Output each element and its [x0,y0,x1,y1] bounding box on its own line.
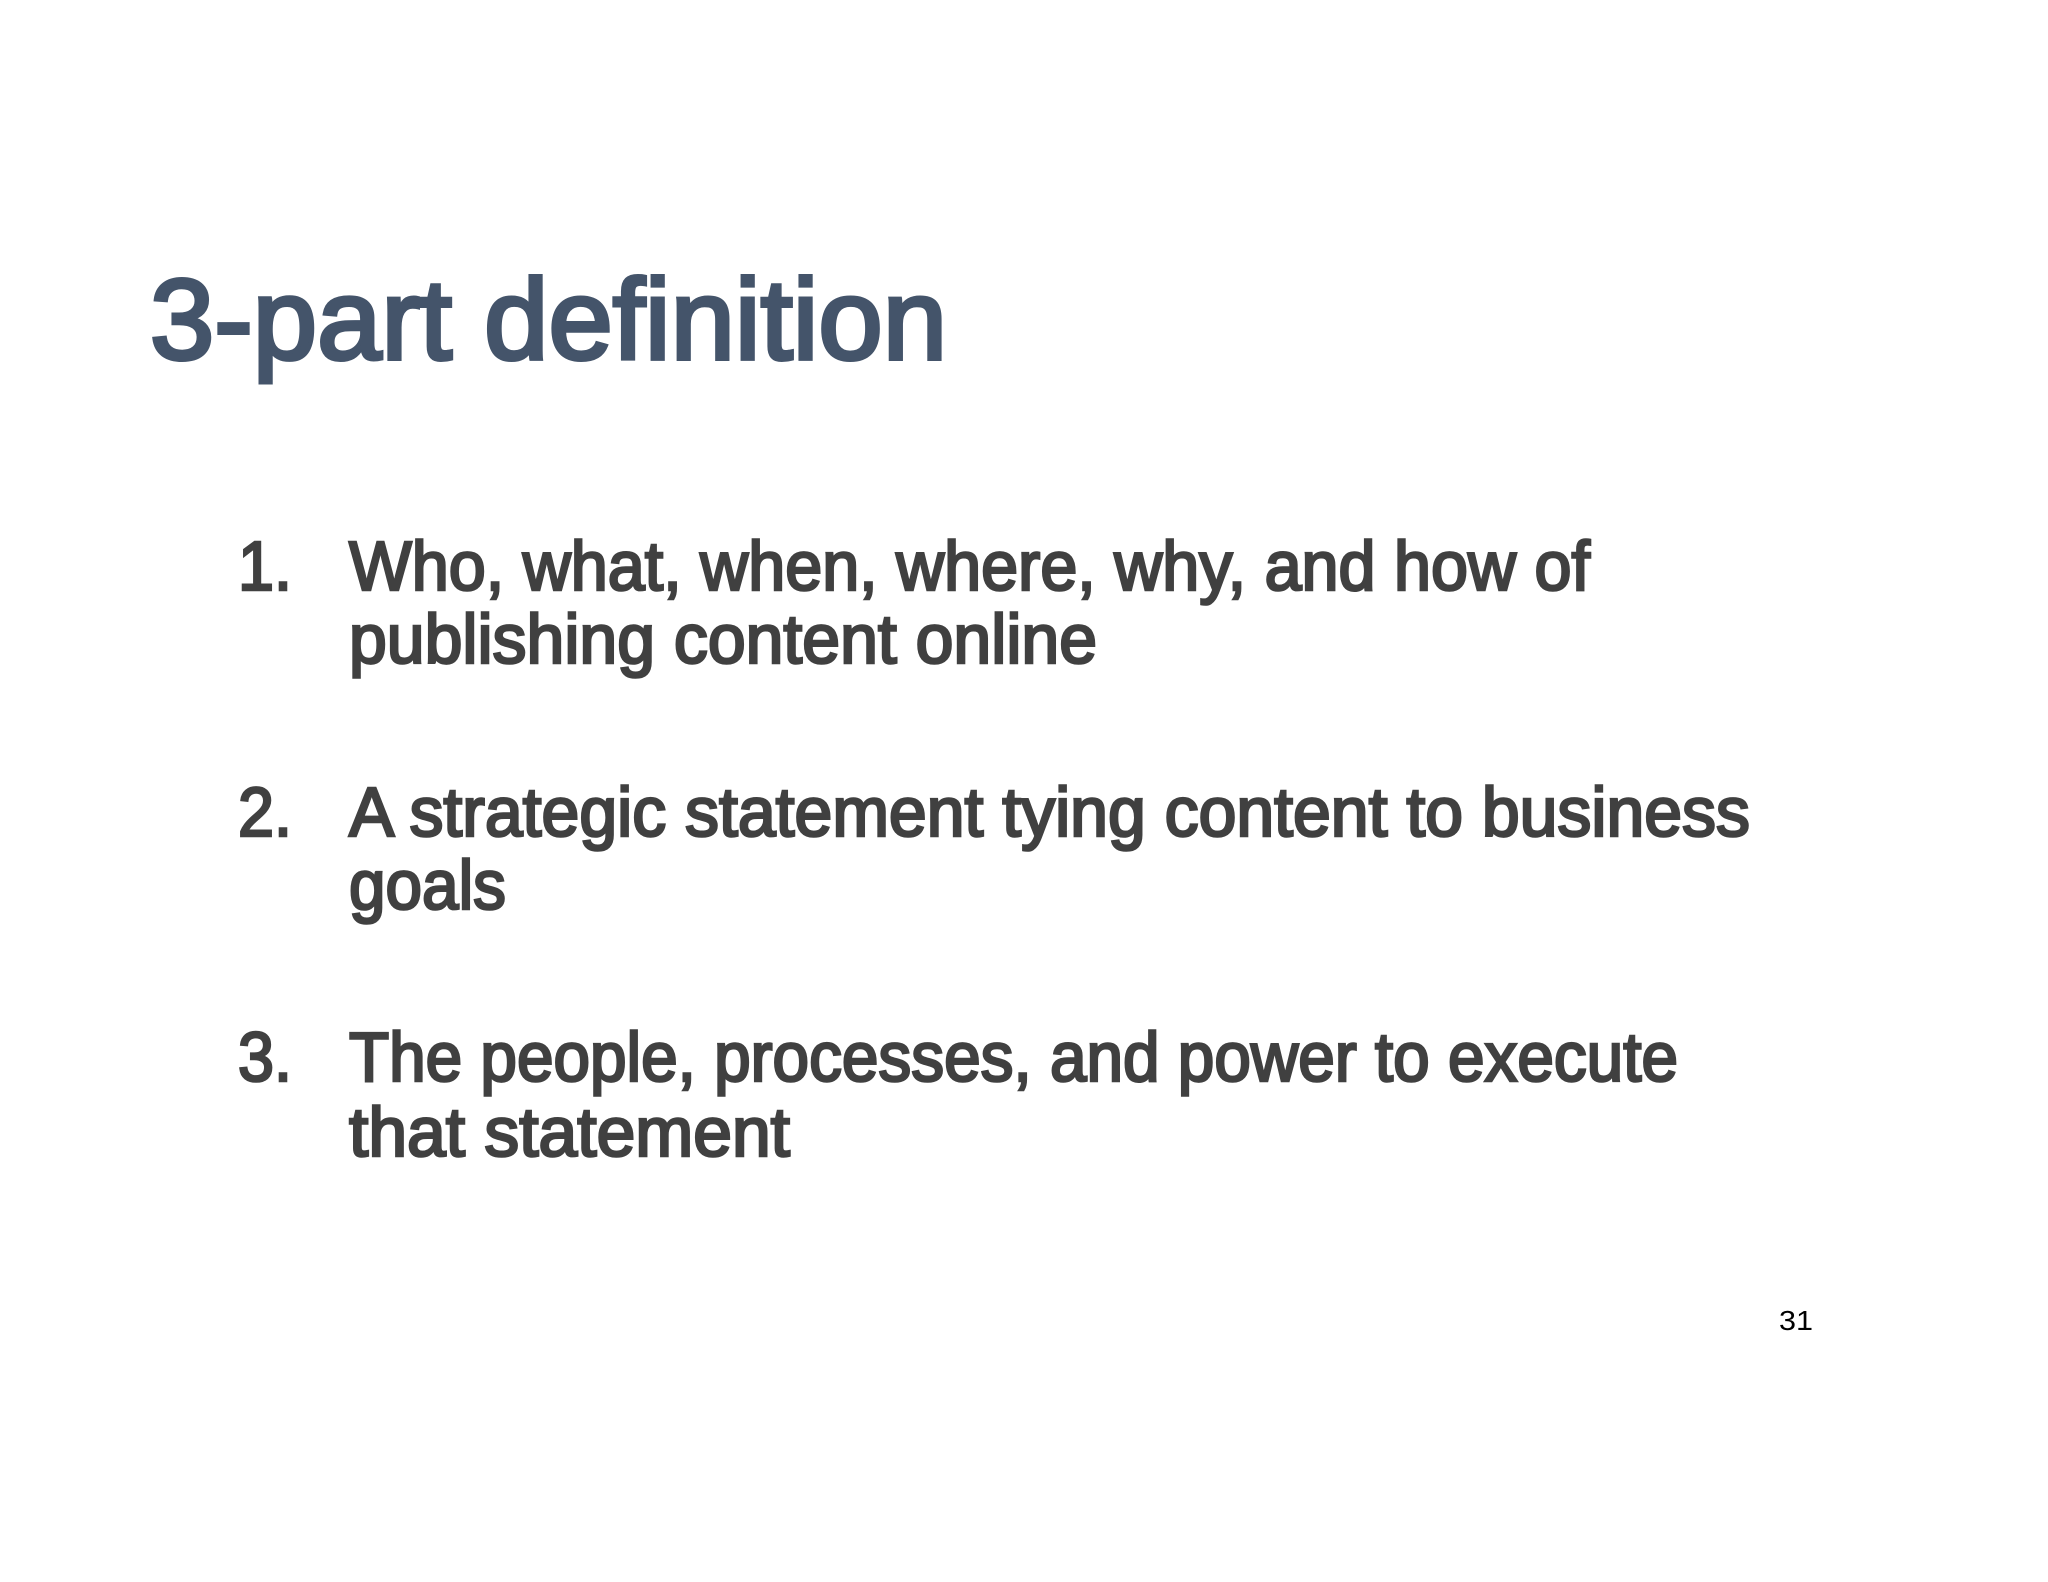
item 3 text: The people, processes, and power to execute [349,1018,1678,1096]
item 2 text: goals [349,846,506,924]
item 1 text [349,527,1591,678]
item 1 text: publishing content online [349,600,1097,678]
item 3 text [349,1018,1678,1171]
title: 3-part definition [150,257,947,384]
list item 2 [238,773,1750,924]
item 3 text: that statement [349,1093,790,1171]
page number: 31 [1779,1305,1813,1336]
item 2 text: A strategic statement tying content to business [349,773,1750,851]
item 2 text [349,773,1750,924]
number 2: 2. [238,773,292,851]
item 1 text: Who, what, when, where, why, and how of [349,527,1591,605]
number 1: 1. [238,527,292,605]
list item 3 [238,1018,1678,1171]
number 3: 3. [238,1018,292,1096]
list item 1 [238,527,1591,678]
